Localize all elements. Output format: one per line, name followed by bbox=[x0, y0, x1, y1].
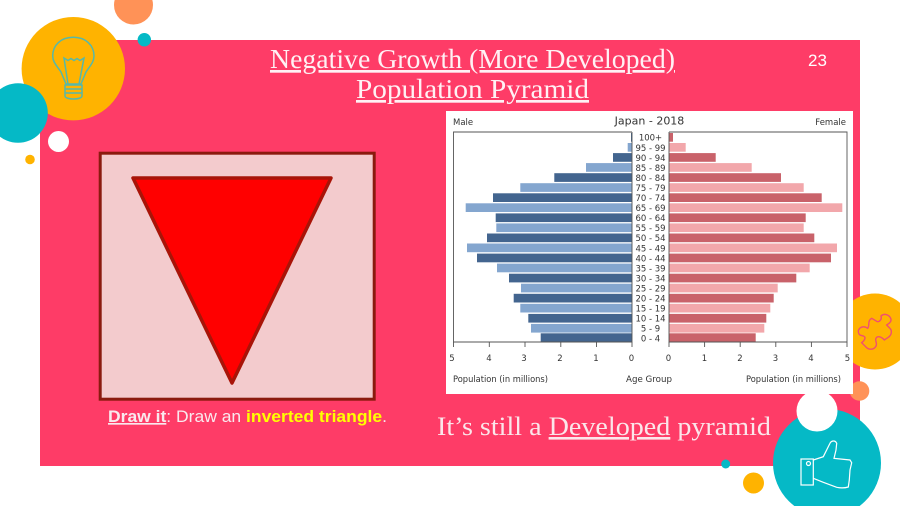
age group labels: 30 - 34 bbox=[635, 274, 666, 284]
axis tick labels: 5 bbox=[845, 354, 850, 364]
age group labels: 90 - 94 bbox=[635, 154, 666, 164]
age group labels: 65 - 69 bbox=[635, 204, 666, 214]
axis titles: Population (in millions) bbox=[453, 375, 548, 385]
age group labels: 0 - 4 bbox=[641, 335, 660, 345]
age group labels: 45 - 49 bbox=[635, 244, 666, 254]
age group labels: 100+ bbox=[639, 134, 662, 144]
circle: orange top bbox=[114, 0, 153, 24]
caption: It’s still a Developed pyramid bbox=[437, 412, 771, 441]
axis tick labels: 5 bbox=[449, 354, 455, 364]
icon: inverted triangle bbox=[133, 178, 331, 383]
title: Population Pyramid bbox=[356, 74, 590, 104]
axis tick labels: 4 bbox=[486, 354, 492, 364]
circle: teal left bbox=[0, 83, 48, 143]
icon: thumbs up bbox=[773, 390, 881, 506]
chart title and side labels: Male bbox=[453, 118, 473, 128]
age group labels: 55 - 59 bbox=[635, 224, 666, 234]
panel: pink background bbox=[40, 40, 860, 466]
circle: small yellow left bbox=[25, 155, 35, 164]
axis tick labels bbox=[449, 354, 850, 364]
axis titles: Population (in millions) bbox=[746, 375, 841, 385]
age group labels: 20 - 24 bbox=[635, 294, 666, 304]
chart: Japan 2018 population pyramid bbox=[446, 111, 853, 394]
female bars bbox=[669, 133, 842, 342]
male bars bbox=[466, 133, 632, 342]
age group labels: 5 - 9 bbox=[641, 325, 660, 335]
instruction text: Draw it: Draw an inverted triangle . bbox=[108, 408, 387, 426]
axis tick labels: 1 bbox=[702, 354, 707, 364]
age group labels: 75 - 79 bbox=[635, 184, 666, 194]
title: Negative Growth (More Developed) bbox=[270, 44, 675, 74]
age group labels: 95 - 99 bbox=[635, 144, 666, 154]
circle: yellow bottom bbox=[743, 472, 764, 494]
title bbox=[270, 44, 675, 104]
axis tick labels: 3 bbox=[773, 354, 778, 364]
axis tick labels: 2 bbox=[557, 354, 563, 364]
axis tick labels: 3 bbox=[521, 354, 527, 364]
axis tick labels: 0 bbox=[629, 354, 634, 364]
age group labels: 85 - 89 bbox=[635, 164, 666, 174]
age group labels: 35 - 39 bbox=[635, 264, 666, 274]
age group labels: 60 - 64 bbox=[635, 214, 666, 224]
icon: puzzle piece bbox=[837, 294, 900, 370]
circle: small teal top bbox=[138, 33, 151, 46]
chart axes bbox=[454, 132, 847, 347]
axis tick labels: 0 bbox=[666, 354, 671, 364]
axis titles bbox=[453, 375, 841, 385]
age group labels: 80 - 84 bbox=[635, 174, 666, 184]
circle: white left bbox=[48, 131, 69, 152]
circle: small teal bottom bbox=[721, 460, 730, 468]
age group labels: 70 - 74 bbox=[635, 194, 666, 204]
age group labels: 25 - 29 bbox=[635, 284, 666, 294]
chart title and side labels: Female bbox=[815, 118, 846, 128]
age group labels: 15 - 19 bbox=[635, 305, 666, 315]
axis tick labels: 2 bbox=[737, 354, 743, 364]
icon: light bulb bbox=[22, 17, 125, 120]
axis titles: Age Group bbox=[626, 375, 672, 385]
age group labels: 40 - 44 bbox=[635, 254, 666, 264]
chart title and side labels: Japan - 2018 bbox=[614, 114, 684, 128]
panel: inverted triangle drawing bbox=[100, 153, 374, 399]
chart title and side labels bbox=[453, 114, 846, 128]
age group labels: 10 - 14 bbox=[635, 315, 666, 325]
axis tick labels: 4 bbox=[808, 354, 814, 364]
age group labels: 50 - 54 bbox=[635, 234, 666, 244]
axis tick labels: 1 bbox=[593, 354, 599, 364]
page number: 23 bbox=[808, 51, 827, 70]
circle: orange right bbox=[850, 381, 869, 401]
age group labels bbox=[635, 134, 666, 345]
